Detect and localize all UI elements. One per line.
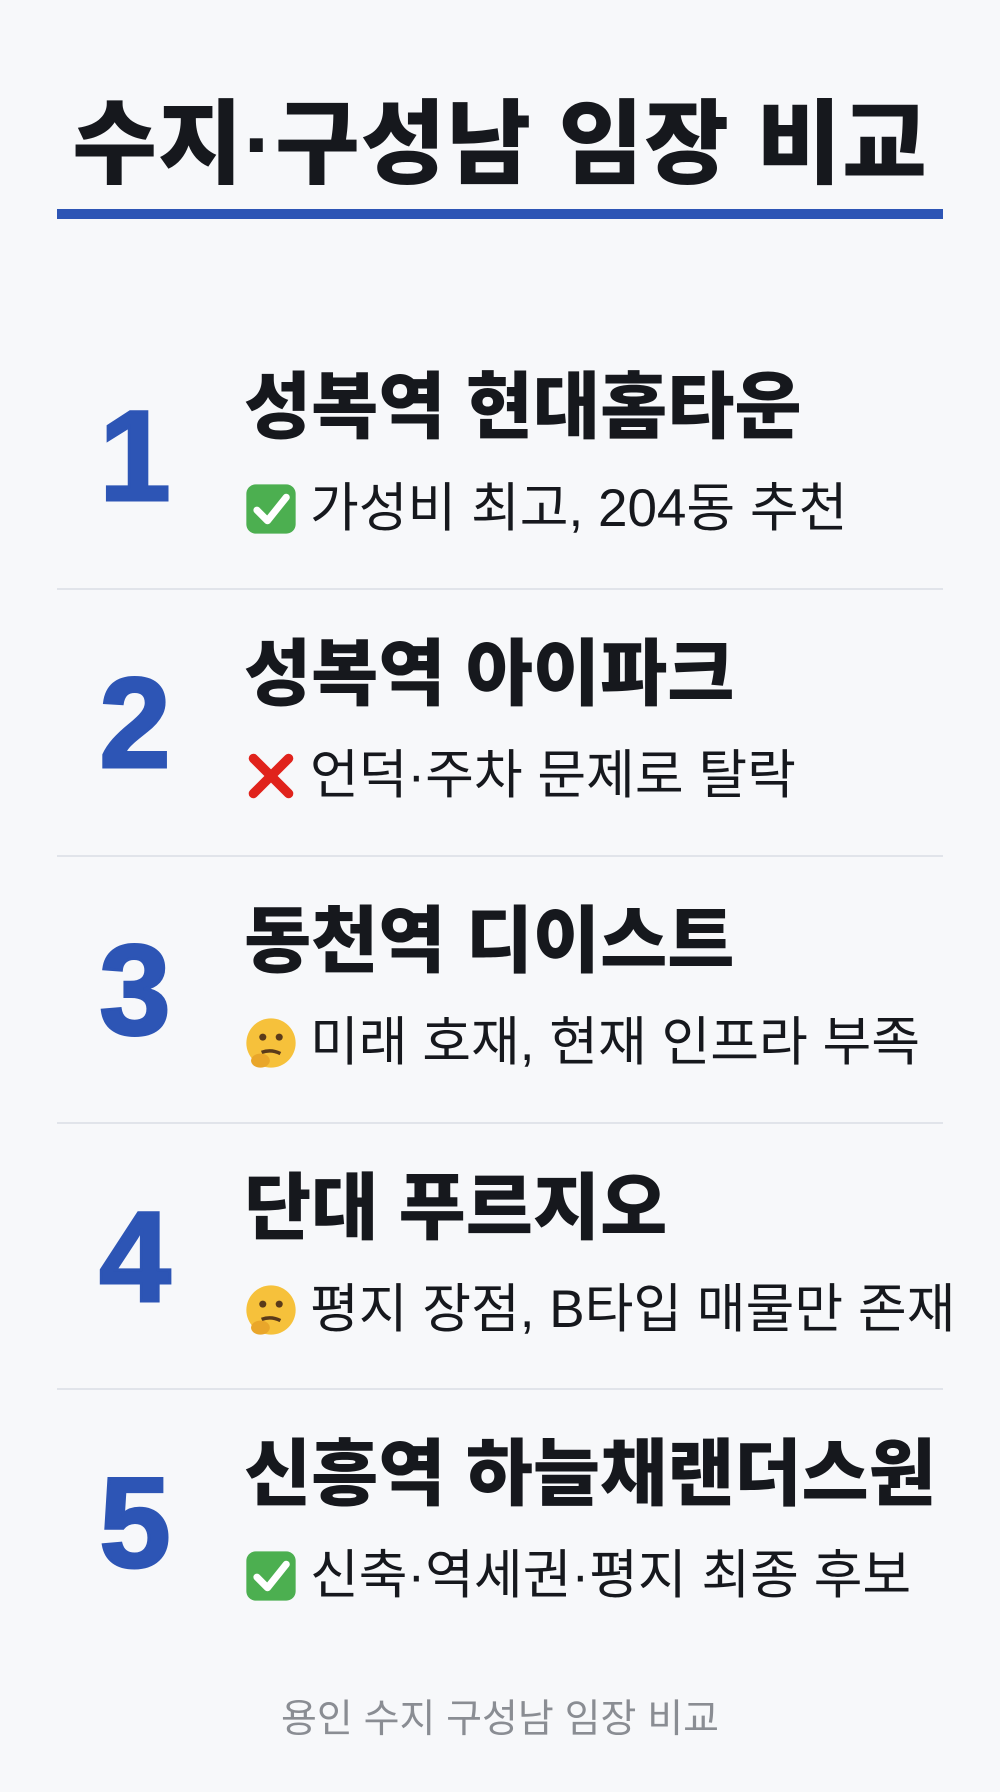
subtext 5: 신축·역세권·평지 최종 후보 xyxy=(310,1546,911,1605)
title: 수지·구성남 임장 비교 xyxy=(72,94,928,196)
heading 2: 성복역 아이파크 xyxy=(244,634,734,715)
footer: 용인 수지 구성남 임장 비교 xyxy=(281,1698,719,1741)
heading 4: 단대 푸르지오 xyxy=(244,1168,667,1249)
subtext 2: 언덕·주차 문제로 탈락 xyxy=(310,746,796,805)
heading 3: 동천역 디이스트 xyxy=(244,901,734,982)
number 4: 4 xyxy=(99,1186,171,1329)
row 1 xyxy=(99,367,847,538)
number 3: 3 xyxy=(99,919,171,1062)
subtext 4: 평지 장점, B타입 매물만 존재 xyxy=(310,1280,955,1339)
number 5: 5 xyxy=(99,1452,171,1595)
heading 5: 신흥역 하늘채랜더스원 xyxy=(244,1434,936,1515)
subtext 3: 미래 호재, 현재 인프라 부족 xyxy=(310,1013,920,1072)
row 3 xyxy=(99,901,920,1072)
row 4 xyxy=(99,1168,955,1339)
number 2: 2 xyxy=(99,652,171,795)
number 1: 1 xyxy=(99,385,171,528)
row 5 xyxy=(99,1434,936,1605)
heading 1: 성복역 현대홈타운 xyxy=(244,367,802,448)
row 2 xyxy=(99,634,796,805)
subtext 1: 가성비 최고, 204동 추천 xyxy=(310,479,847,538)
